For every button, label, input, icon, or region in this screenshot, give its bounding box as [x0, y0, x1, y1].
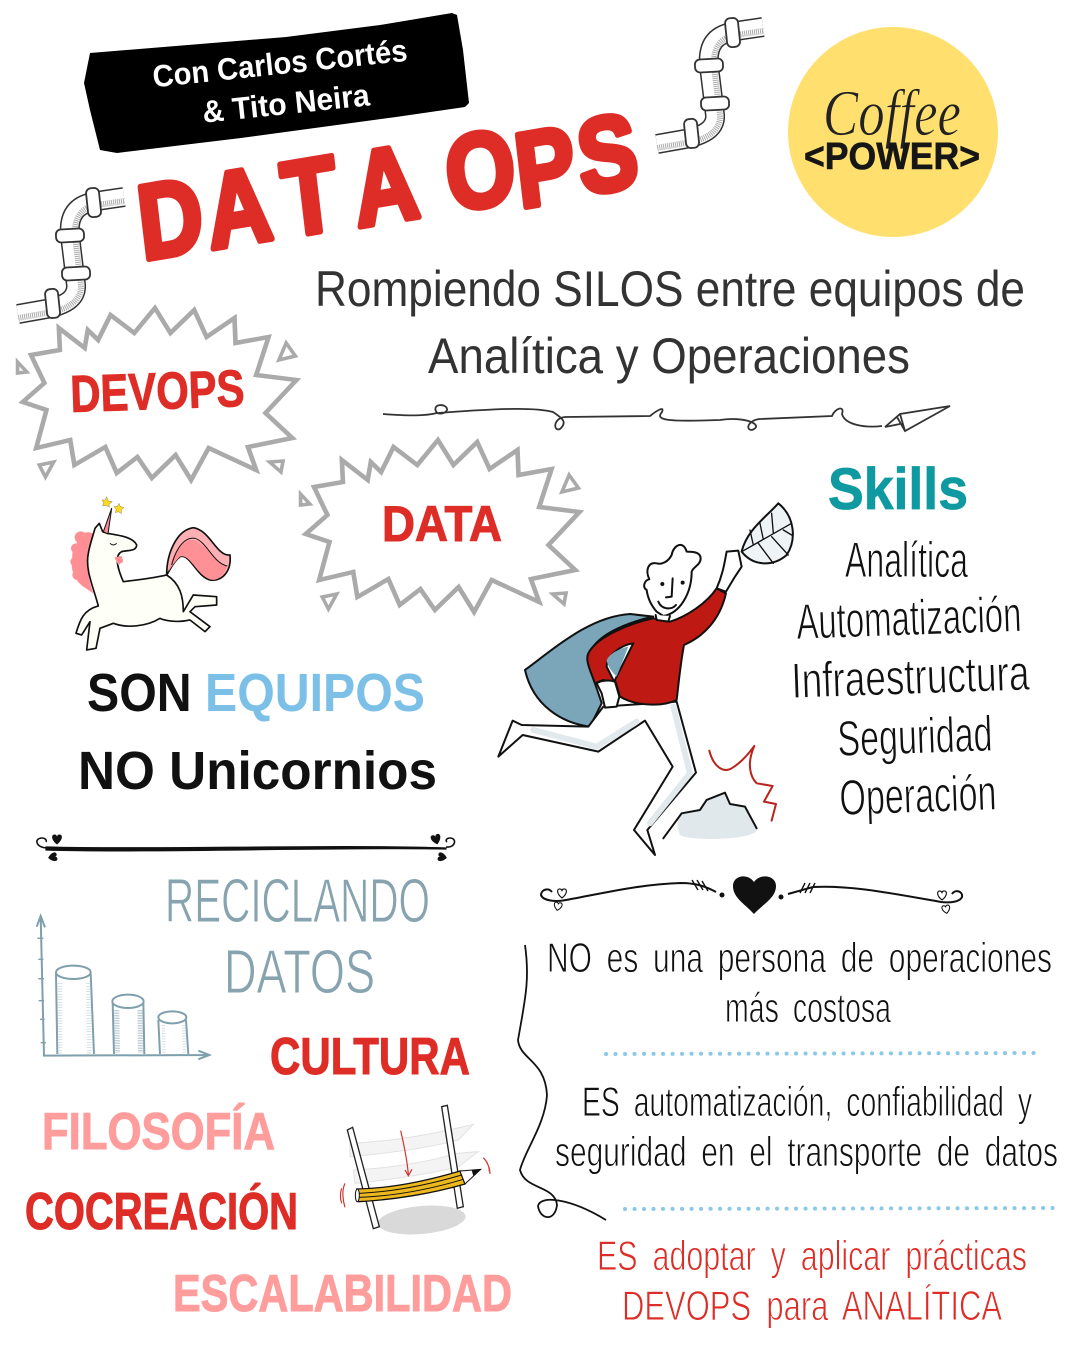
list: skills: Analítica — [845, 532, 968, 588]
logo: Coffee Power: Coffee — [823, 77, 961, 150]
burst: DEVOPS: DEVOPS — [69, 360, 245, 424]
author banner — [84, 13, 469, 153]
icon: pipe right — [657, 17, 763, 149]
text: cultura: CULTURA — [270, 1028, 470, 1086]
title: DATA OPS — [132, 90, 644, 283]
lower hand — [597, 681, 619, 708]
text: reciclando datos: RECICLANDO — [165, 867, 430, 936]
icon: pipe left — [18, 187, 124, 319]
bracket squiggle — [518, 945, 606, 1220]
list: skills: Operación — [838, 765, 997, 826]
statement: no es: más costosa — [725, 984, 891, 1031]
author banner: Con Carlos Cortés — [151, 33, 409, 94]
dotted separator — [625, 1208, 1056, 1209]
text: cocreación: COCREACIÓN — [25, 1183, 298, 1241]
statement: no es — [547, 934, 1052, 1031]
heading: skills: Skills — [828, 457, 968, 522]
icon: unicorn — [70, 497, 230, 650]
text: reciclando datos — [165, 867, 430, 1007]
icon: bending pencil — [340, 1105, 490, 1238]
subtitle: Analítica y Operaciones — [428, 328, 910, 384]
logo: Coffee Power: <POWER> — [804, 136, 980, 178]
burst: DEVOPS — [18, 308, 296, 480]
burst: DATA: DATA — [382, 496, 502, 552]
chart: cylinder bars — [37, 916, 209, 1059]
text: no unicornios: NO Unicornios — [78, 741, 437, 801]
rock — [677, 793, 757, 839]
divider left — [37, 833, 455, 862]
raised hand — [717, 551, 742, 592]
subtitle — [315, 261, 1025, 384]
list: skills: Seguridad — [836, 706, 993, 767]
divider with heart — [541, 876, 962, 914]
impact spark — [709, 746, 776, 821]
text: reciclando datos: DATOS — [224, 938, 375, 1007]
statement: es — [555, 1078, 1058, 1175]
text: escalabilidad: ESCALABILIDAD — [173, 1265, 512, 1323]
logo: Coffee Power — [788, 27, 998, 237]
list: skills — [790, 532, 1030, 826]
leaf — [742, 503, 793, 563]
flourish with paper plane — [383, 405, 950, 431]
head — [644, 545, 701, 616]
burst: DATA — [301, 440, 579, 612]
statement: adoptar — [597, 1232, 1027, 1329]
dotted separator — [606, 1053, 1036, 1054]
author banner: & Tito Neira — [201, 77, 372, 130]
sweater — [587, 588, 726, 705]
legs — [498, 702, 696, 855]
text: filosofía: FILOSOFÍA — [42, 1103, 275, 1161]
illustration: running superhero — [498, 503, 793, 855]
cape — [525, 614, 653, 727]
text: son equipos: SON EQUIPOS — [87, 663, 425, 723]
